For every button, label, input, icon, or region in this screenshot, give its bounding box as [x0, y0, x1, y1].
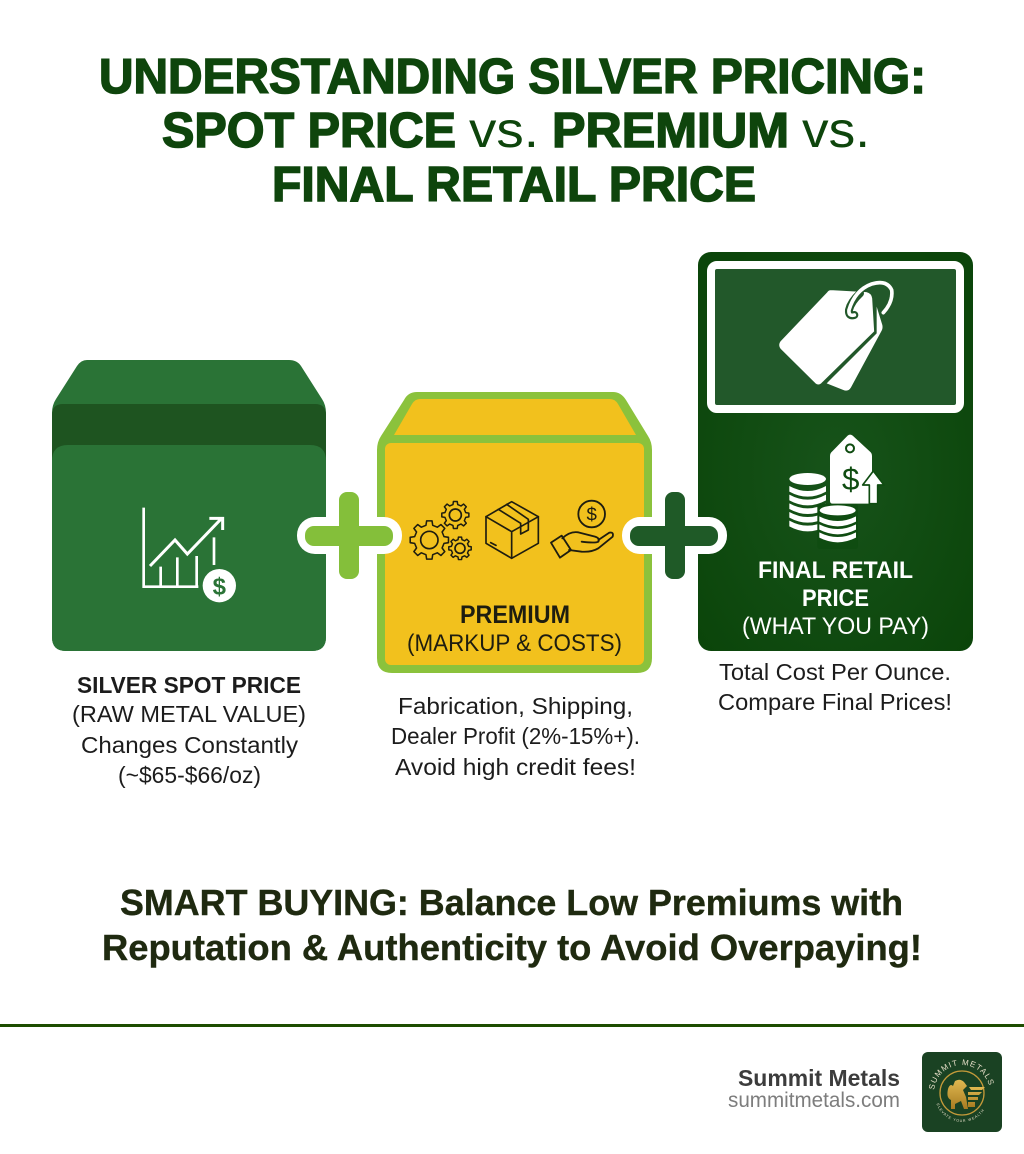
plus sign: premium to final	[622, 492, 727, 579]
icon: coins with price tag and up arrow: $	[842, 462, 859, 497]
caption: premium: Fabrication, Shipping,	[398, 693, 633, 719]
title: vs.	[802, 102, 870, 158]
caption: premium	[391, 693, 640, 780]
final retail price label: FINAL RETAIL	[758, 557, 913, 584]
caption: spot price: Changes Constantly	[81, 732, 299, 758]
footer rule	[0, 1024, 1024, 1027]
caption: final price	[718, 659, 952, 715]
icon: coin above open hand	[551, 501, 613, 558]
plus sign: spot to premium	[297, 492, 402, 579]
footer brand text: Summit Metals	[738, 1065, 900, 1091]
caption: premium: Dealer Profit (2%-15%+).	[391, 723, 640, 749]
premium label: (MARKUP & COSTS)	[407, 630, 622, 657]
caption: spot price	[72, 672, 306, 788]
logo: ELEVATE YOUR WEALTH	[936, 1103, 984, 1122]
caption: premium: Avoid high credit fees!	[395, 754, 636, 780]
bottom takeaway: Reputation & Authenticity to Avoid Overpaying!	[102, 927, 922, 968]
footer brand text	[728, 1065, 900, 1112]
icon: rising chart with dollar coin: $	[213, 573, 226, 600]
premium label	[407, 601, 622, 657]
panel: final retail price box	[698, 252, 973, 651]
caption: spot price: (RAW METAL VALUE)	[72, 701, 306, 727]
caption: final price: Total Cost Per Ounce.	[719, 659, 951, 685]
title	[99, 50, 926, 212]
premium label: PREMIUM	[460, 601, 570, 629]
caption: spot price: SILVER SPOT PRICE	[77, 672, 301, 698]
title: SPOT PRICE	[162, 104, 456, 158]
bottom takeaway	[102, 882, 922, 968]
title: UNDERSTANDING SILVER PRICING:	[99, 50, 926, 104]
panel: premium box	[377, 392, 652, 673]
title: vs.	[469, 102, 539, 158]
final retail price label	[742, 557, 929, 640]
title: PREMIUM	[552, 104, 789, 158]
logo: SUMMIT METALS	[929, 1059, 994, 1090]
logo	[922, 1052, 1002, 1132]
icon: price tags	[778, 283, 892, 391]
icon: rising chart with dollar coin	[144, 508, 236, 602]
final retail price label: PRICE	[802, 585, 869, 612]
caption: final price: Compare Final Prices!	[718, 689, 952, 715]
icon: gears and parcel	[410, 501, 538, 560]
title: FINAL RETAIL PRICE	[272, 158, 756, 212]
bottom takeaway: SMART BUYING: Balance Low Premiums with	[120, 882, 903, 923]
icon: coin above open hand: $	[586, 504, 597, 525]
final retail price label: (WHAT YOU PAY)	[742, 613, 929, 640]
panel: silver spot price box	[52, 360, 326, 651]
footer brand text: summitmetals.com	[728, 1089, 900, 1112]
caption: spot price: (~$65-$66/oz)	[118, 762, 261, 788]
icon: coins with price tag and up arrow	[789, 435, 884, 549]
